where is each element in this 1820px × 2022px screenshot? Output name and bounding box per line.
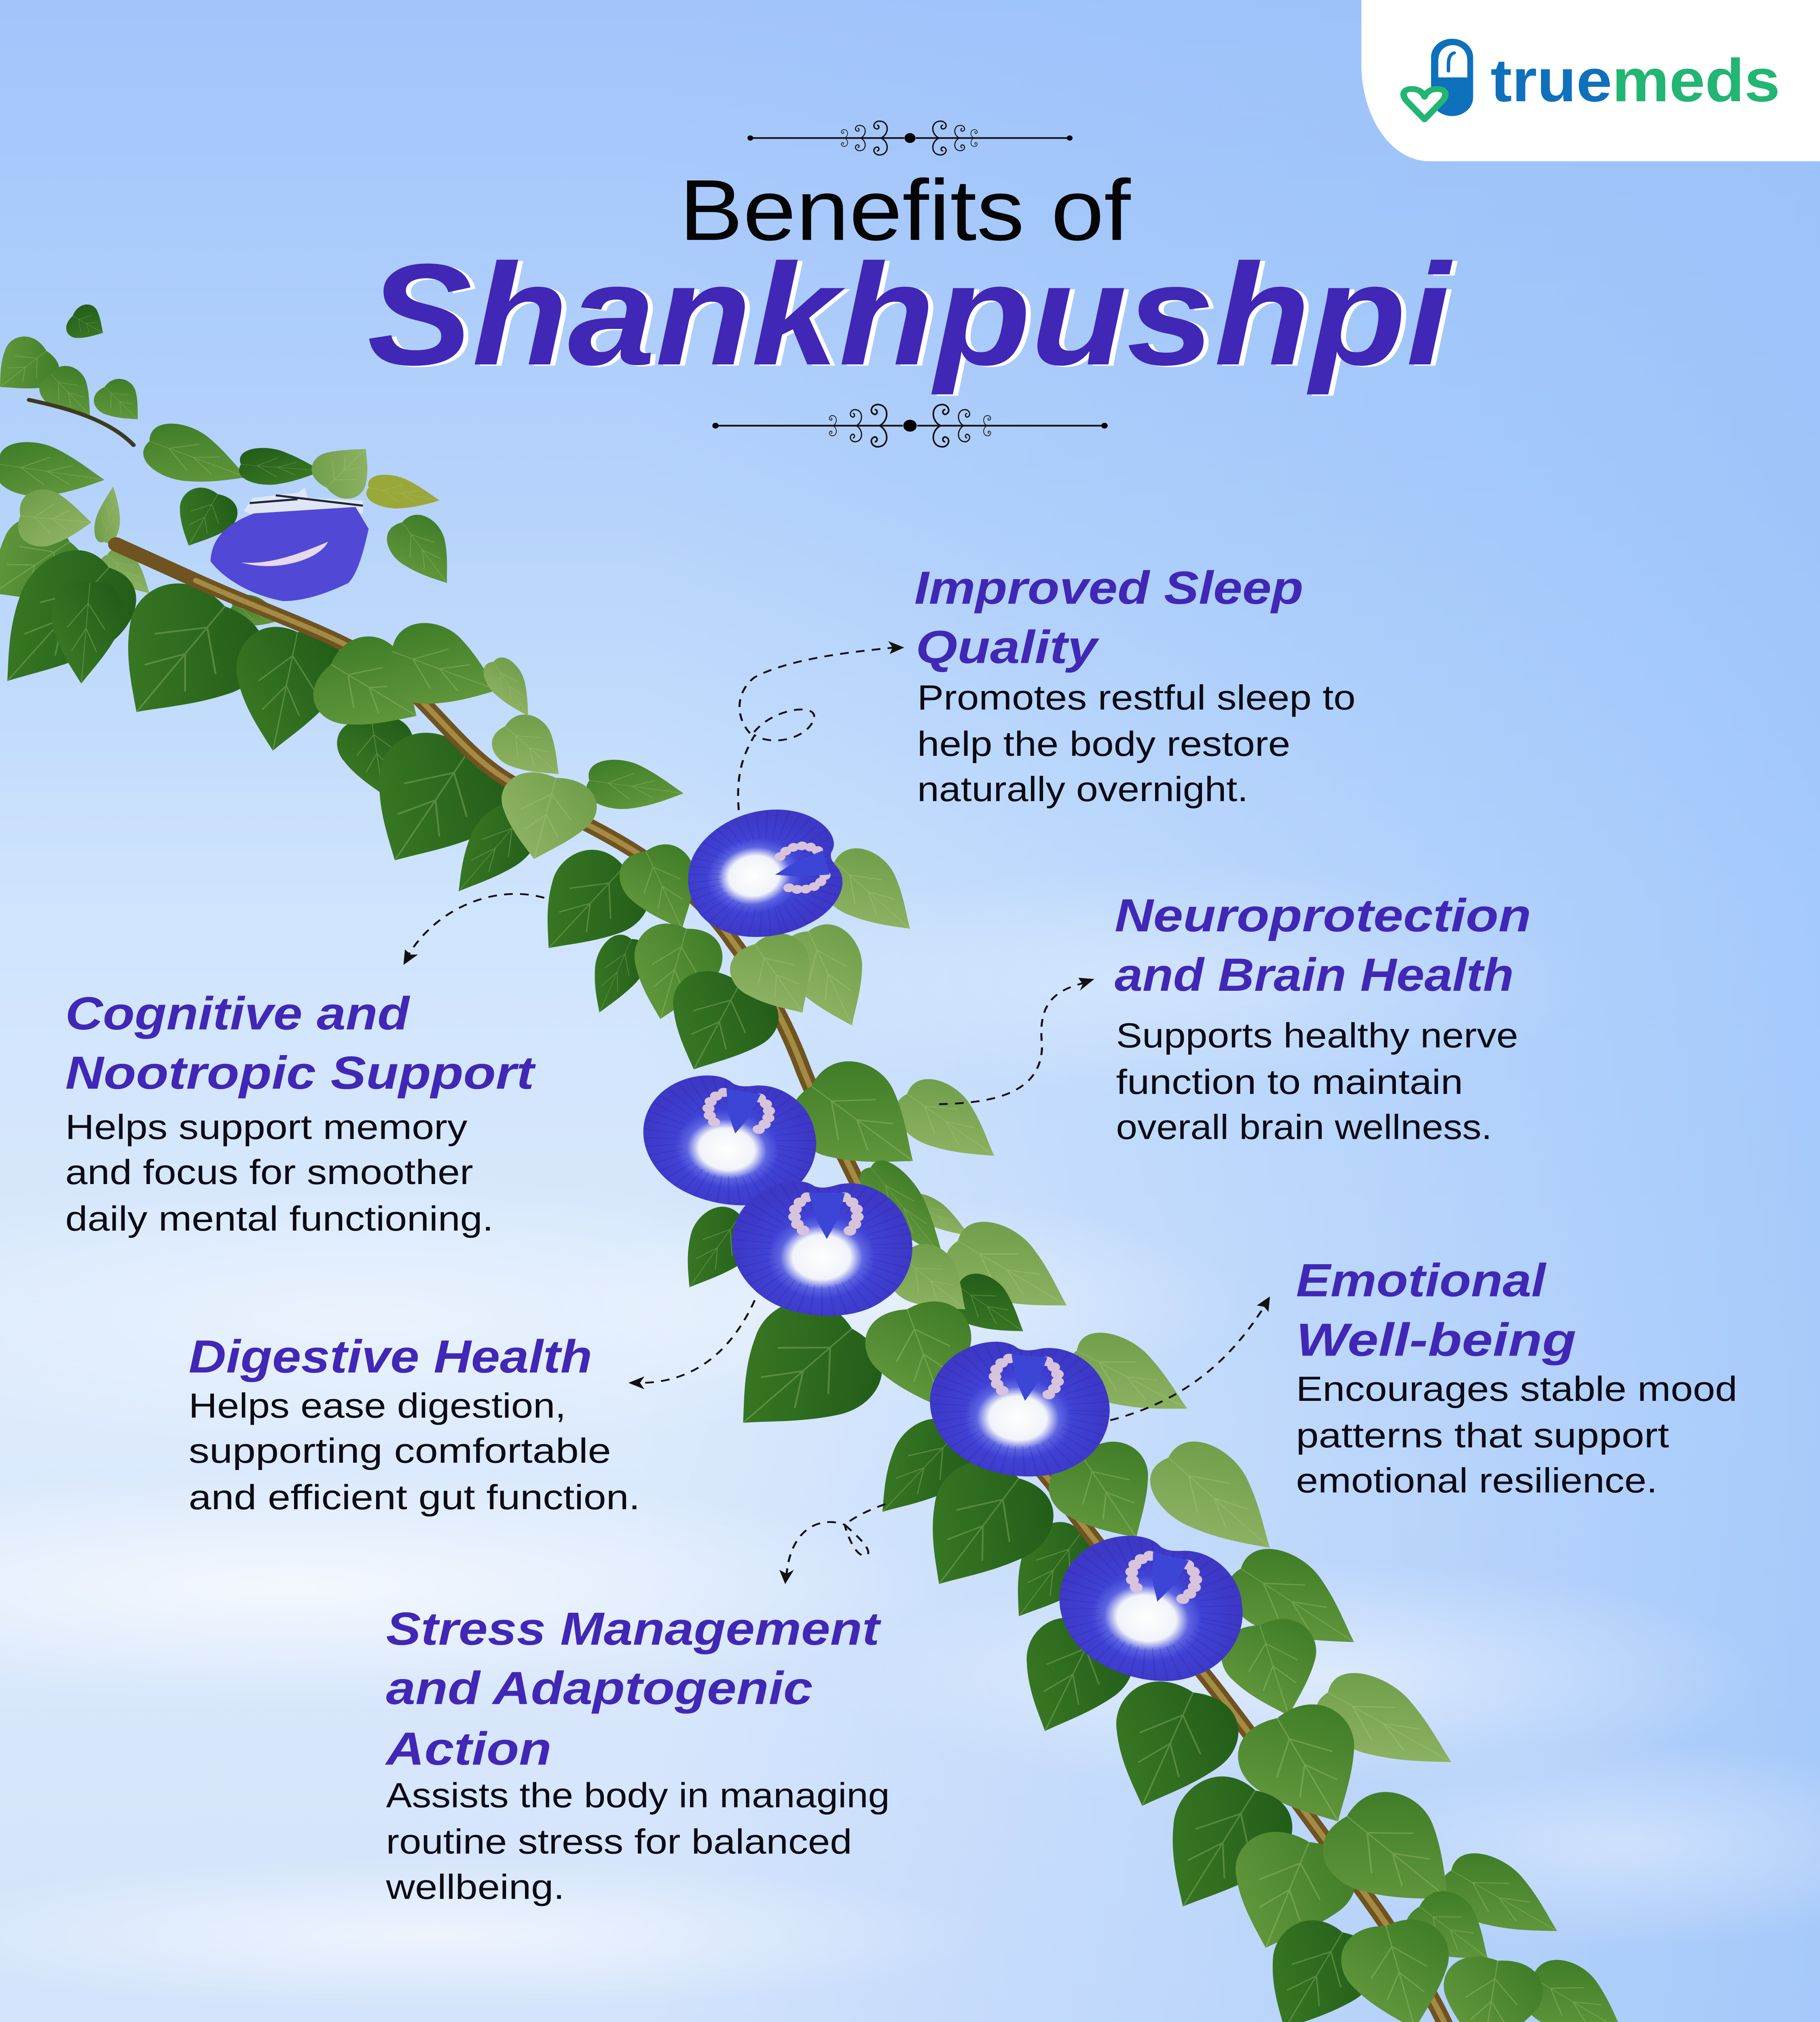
description: Assists the body in managing [386, 1776, 890, 1815]
arrow: to Digestive Health [629, 1300, 755, 1389]
heading: Neuroprotection [1115, 889, 1531, 941]
heading: and Adaptogenic [386, 1662, 813, 1714]
panel: Emotional Well-being [1296, 1254, 1737, 1500]
description: Helps support memory [65, 1108, 468, 1146]
heading [1115, 889, 1531, 1000]
description: emotional resilience. [1296, 1462, 1657, 1500]
flower 2 [631, 1066, 827, 1216]
description [1116, 1016, 1518, 1146]
flower 3 [732, 1181, 912, 1316]
description: Helps ease digestion, [189, 1387, 566, 1425]
flower 4 [923, 1337, 1116, 1483]
heading [65, 987, 536, 1099]
panel: Cognitive and Nootropic Support [65, 987, 536, 1238]
heading: Nootropic Support [65, 1047, 536, 1099]
description: Promotes restful sleep to [917, 678, 1356, 717]
description: naturally overnight. [917, 770, 1248, 809]
panel: Stress Management and Adaptogenic Action [385, 1603, 890, 1906]
description [385, 1776, 890, 1906]
title: Benefits of: Benefits of [679, 162, 1131, 258]
heading [914, 562, 1303, 673]
panel: Neuroprotection and Brain Health [1115, 889, 1531, 1146]
description [189, 1387, 640, 1517]
description: Supports healthy nerve [1116, 1016, 1518, 1055]
description [65, 1108, 493, 1238]
description [1296, 1370, 1737, 1500]
heading: Digestive Health [189, 1330, 592, 1382]
arrow: to Improved Sleep Quality [738, 641, 904, 810]
description [917, 678, 1356, 809]
flower: top, side view [210, 488, 368, 601]
description: daily mental functioning. [65, 1199, 493, 1238]
arrow: to Emotional Well-being [1110, 1297, 1270, 1420]
description: wellbeing. [385, 1868, 565, 1906]
title: Shankhpushpi: Shankhpushpi [367, 234, 1453, 396]
heading: Well-being [1296, 1313, 1576, 1366]
illustration: butterfly pea vine [0, 300, 1643, 2022]
description: routine stress for balanced [386, 1823, 852, 1861]
description: overall brain wellness. [1116, 1108, 1492, 1146]
description: help the body restore [917, 725, 1290, 764]
description: Encourages stable mood [1296, 1370, 1737, 1409]
flourish: bottom ornament [712, 404, 1108, 447]
flower 5 [1040, 1522, 1260, 1697]
arrow: to Neuroprotection and Brain Health [939, 978, 1094, 1104]
leaves in front of stem [300, 613, 1547, 2022]
heading: Improved Sleep [914, 562, 1303, 613]
heading [1296, 1254, 1576, 1366]
heading: Cognitive and [65, 987, 410, 1039]
heading: Stress Management [386, 1603, 881, 1654]
vine stem [29, 400, 1452, 2022]
heading: Emotional [1296, 1254, 1547, 1306]
logo wordmark: truemeds [1490, 47, 1780, 114]
panel: Digestive Health [189, 1330, 640, 1517]
heading [385, 1603, 881, 1775]
description: and focus for smoother [65, 1153, 473, 1192]
heading: Quality [916, 621, 1100, 673]
title: Shankhpushpi: Shankhpushpi [372, 235, 1458, 397]
arrow: to Cognitive and Nootropic Support [404, 894, 544, 965]
panel: Improved Sleep Quality [914, 562, 1356, 809]
description: and efficient gut function. [189, 1478, 640, 1517]
arrow: to Stress Management [779, 1504, 885, 1584]
flourish: top ornament [747, 121, 1073, 155]
heading: and Brain Health [1115, 948, 1514, 1000]
description: patterns that support [1296, 1416, 1669, 1455]
leaves behind stem [0, 300, 1643, 2022]
logo panel: truemeds [1361, 0, 1820, 161]
flower 1 [671, 796, 857, 952]
heading: Action [385, 1722, 552, 1775]
description: function to maintain [1116, 1063, 1463, 1102]
icon: pill with heart [1404, 39, 1473, 119]
description: supporting comfortable [189, 1432, 611, 1470]
